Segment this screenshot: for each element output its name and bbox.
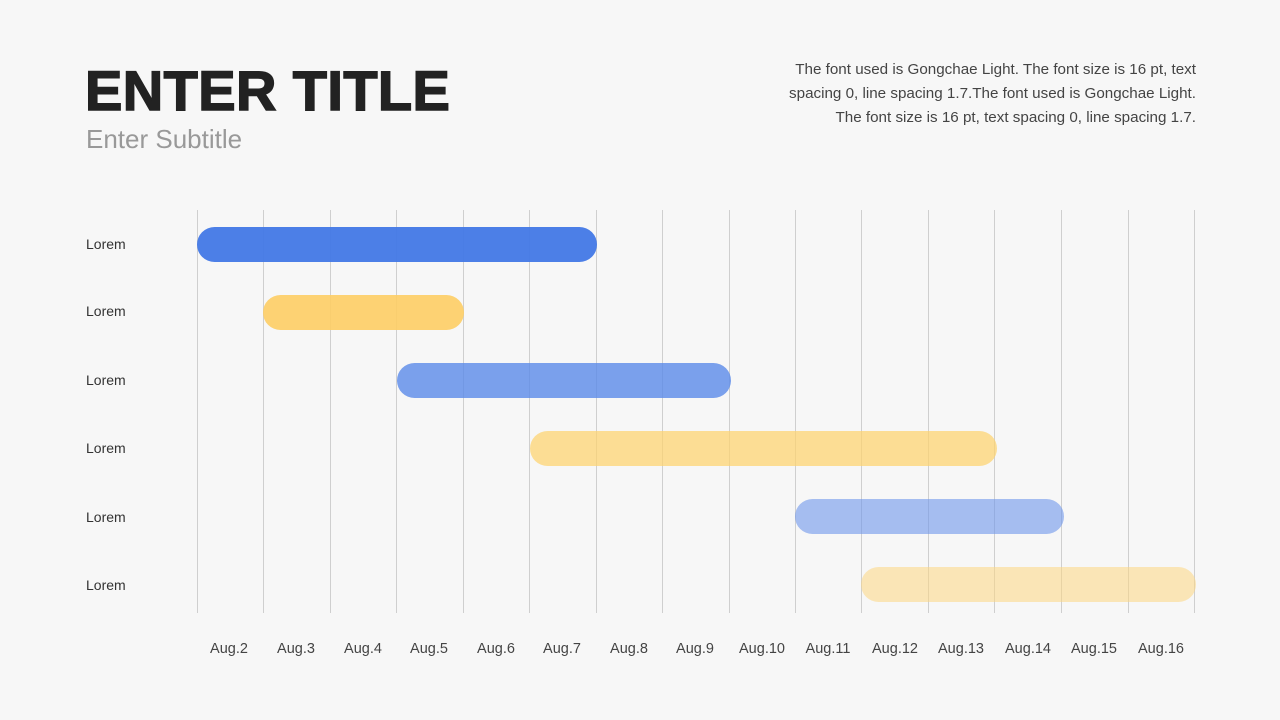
description text: The font size is 16 pt, text spacing 0, line spacing 1.7. — [836, 109, 1196, 126]
date axis: Aug.7 — [543, 641, 581, 657]
description text: spacing 0, line spacing 1.7.The font used is Gongchae Light. — [789, 85, 1196, 102]
bar 3 — [397, 363, 731, 398]
date axis: Aug.5 — [410, 641, 448, 657]
title: ENTER TITLE — [85, 59, 450, 122]
date axis: Aug.10 — [739, 641, 785, 657]
date axis: Aug.2 — [210, 641, 248, 657]
date axis: Aug.3 — [277, 641, 315, 657]
bar 4 — [530, 431, 997, 466]
date axis: Aug.8 — [610, 641, 648, 657]
date axis: Aug.15 — [1071, 641, 1117, 657]
date axis: Aug.16 — [1138, 641, 1184, 657]
bar 5 — [795, 499, 1064, 534]
description text — [789, 61, 1196, 126]
row labels: Lorem — [86, 509, 126, 525]
row labels: Lorem — [86, 236, 126, 252]
date axis: Aug.14 — [1005, 641, 1051, 657]
row labels: Lorem — [86, 440, 126, 456]
bar 1 — [197, 227, 597, 262]
row labels: Lorem — [86, 372, 126, 388]
description text: The font used is Gongchae Light. The font size is 16 pt, text — [795, 61, 1196, 78]
row labels: Lorem — [86, 577, 126, 593]
date axis: Aug.11 — [806, 641, 850, 657]
bar 6 — [861, 567, 1196, 602]
date axis: Aug.9 — [676, 641, 714, 657]
bar 2 — [263, 295, 464, 330]
row labels — [86, 236, 126, 593]
date axis: Aug.13 — [938, 641, 984, 657]
date axis: Aug.6 — [477, 641, 515, 657]
date axis: Aug.4 — [344, 641, 382, 657]
subtitle: Enter Subtitle — [86, 124, 242, 154]
date axis: Aug.12 — [872, 641, 918, 657]
row labels: Lorem — [86, 303, 126, 319]
date axis — [210, 641, 1184, 657]
